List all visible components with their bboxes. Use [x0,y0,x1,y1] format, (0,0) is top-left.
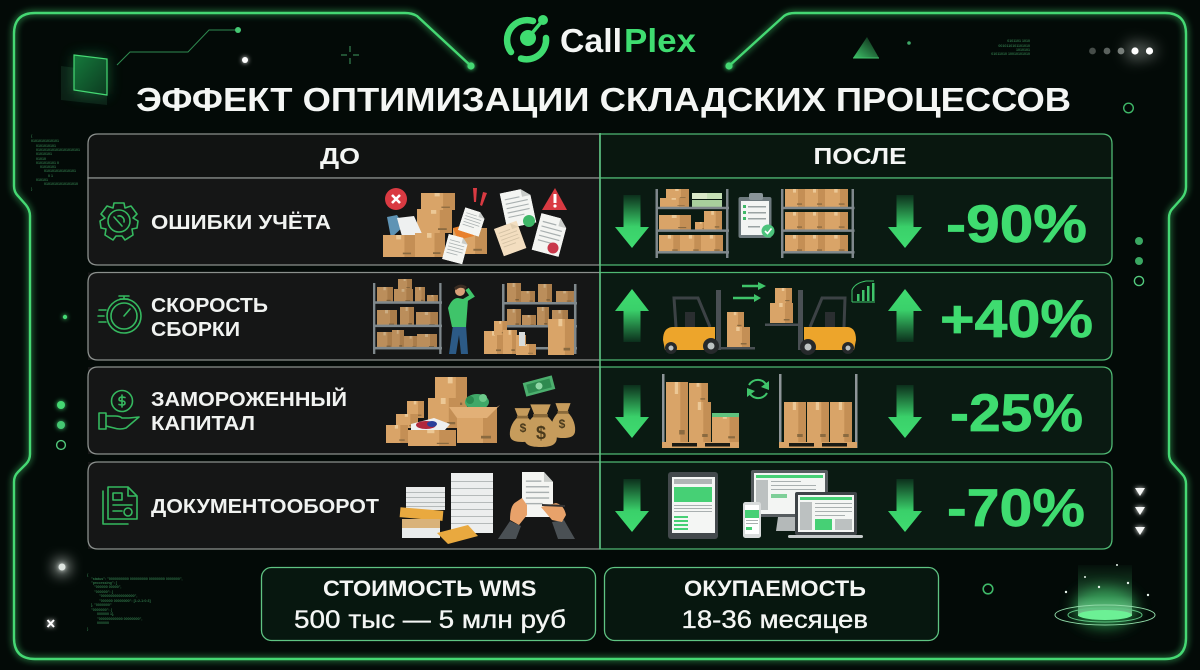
arrow [615,385,649,438]
decor: ring [983,584,993,594]
row 3: frozen capital [88,367,1112,454]
decor: top code: 1010101 [1016,48,1030,52]
row 1: accounting errors [88,178,1112,265]
value: -70% [947,479,1085,538]
decor: right triangles [1135,488,1145,535]
arrow [888,479,922,532]
decor: bottom code: "status": "0000000000 000000000 00000000 0000000", [91,577,183,581]
header row: before [88,134,600,178]
value: +40% [940,290,1093,349]
illustration: boxes and money bags: $ [559,417,566,431]
decor: bottom code [87,573,183,631]
decor: top code: 0101101 1010 [1007,39,1030,43]
decor: bottom code: 000000 1], [97,612,114,616]
decor: left code: { [31,134,33,138]
decor: x mark [48,620,54,627]
decor: bottom code: } [87,627,89,631]
icon: gear [100,203,138,240]
decor: bottom code: "000000000000 00000000", [97,617,142,621]
decor: left code: } [31,187,33,191]
logo mark [507,15,548,59]
decor: left code: 01010 [36,157,46,161]
decor: left code: 01010101 [36,152,52,156]
illustration: pallets and refresh [662,374,858,448]
illustration: messy boxes and documents [383,187,568,264]
decor: left code: 01010101010101 [31,139,59,143]
title: ЭФФЕКТ ОПТИМИЗАЦИИ СКЛАДСКИХ ПРОЦЕССОВ [136,81,1071,118]
arrow [888,385,922,438]
decor: bottom code: 000000 [97,621,109,625]
footer box: cost: СТОИМОСТЬ WMS [323,576,536,601]
header row: after [600,134,1112,178]
label [151,295,268,341]
label: ОШИБКИ УЧЁТА [151,211,331,234]
decor: top code: 0010110101101010 [998,44,1030,48]
decor: bottom code: "000000": { [94,590,114,594]
value: -90% [946,195,1087,254]
illustration: digital devices [668,470,863,539]
header row: before: ДО [320,143,360,169]
decor: left dots [57,315,67,449]
logo [507,15,697,59]
decor: left code: 0101010101010101010101 [36,148,80,152]
label: КАПИТАЛ [151,413,255,435]
decor: bottom code: "000000 00000000": [1:2-1:0:3] [99,599,151,603]
decor: right dots [1134,237,1144,286]
decor: left code: 01010101 [40,165,56,169]
decor: top code: 01011010 10010101010 [991,52,1030,56]
footer box: cost [262,568,596,640]
arrow [615,479,649,532]
row 2: picking speed [88,272,1112,360]
value: -25% [950,384,1083,443]
illustration: forklifts [663,281,875,355]
decor: glowing square [61,55,107,105]
decor: small dot [907,41,911,45]
footer box: payback: 18-36 месяцев [682,606,868,634]
decor: left code: 010101 [36,178,48,182]
footer box: payback: ОКУПАЕМОСТЬ [684,576,866,601]
decor: crosshair [341,46,359,64]
illustration: slow picking, worker and shelves [373,279,577,355]
label: ЗАМОРОЖЕННЫЙ [151,387,347,411]
arrow [615,195,649,248]
label: СКОРОСТЬ [151,295,268,317]
row 4: document flow [88,462,1112,549]
illustration: boxes and money bags [386,375,575,447]
decor: bottom code: "000000 00000", [94,585,121,589]
label [151,387,347,435]
decor: bottom code: "0000000": { [91,608,113,612]
arrow [888,195,922,248]
footer box: payback [604,568,938,640]
decor: dots row [1089,41,1157,61]
decor: soft white dot [55,560,69,574]
arrow [888,289,922,342]
decor: left code: 0101010101 [36,144,56,148]
decor: left code: 0101010101 0 [36,161,59,165]
icon: hand with coin [99,390,139,429]
decor: triangle [853,37,879,58]
decor: ring [1124,103,1133,113]
logo wordmark: Call [560,22,622,59]
decor: left code [31,134,80,191]
illustration: paper stacks and hands [400,472,575,544]
illustration: boxes and money bags: $ [520,421,527,435]
logo wordmark [560,22,697,59]
decor: bottom code: "processing": [ [91,581,118,585]
center divider [599,133,601,549]
decor: bottom code: ], "0000000" [91,603,112,607]
arrow [615,289,649,342]
icon: stopwatch [98,296,141,333]
decor: hologram portal [1055,564,1155,628]
label: ДОКУМЕНТООБОРОТ [151,496,379,518]
decor: top code [991,39,1030,56]
decor: left code: 0101010101010101 [44,169,76,173]
decor: left code: 01010101010101010 [44,182,78,186]
illustration: boxes and money bags: $ [536,423,546,443]
illustration: ordered shelves and checklist [656,189,854,258]
header row: after: ПОСЛЕ [814,143,906,169]
decor: bottom code: "00000000000000000", [99,594,137,598]
decor: circuit line [117,27,241,65]
logo wordmark: Plex [624,22,697,59]
label: СБОРКИ [151,319,240,341]
decor: left code: 0 1 [48,174,53,178]
decor: white dot [242,57,248,63]
decor: bottom code: { [87,573,89,577]
footer box: cost: 500 тыс — 5 млн руб [294,606,566,634]
icon: document [103,487,137,524]
frame end dots [467,62,733,70]
